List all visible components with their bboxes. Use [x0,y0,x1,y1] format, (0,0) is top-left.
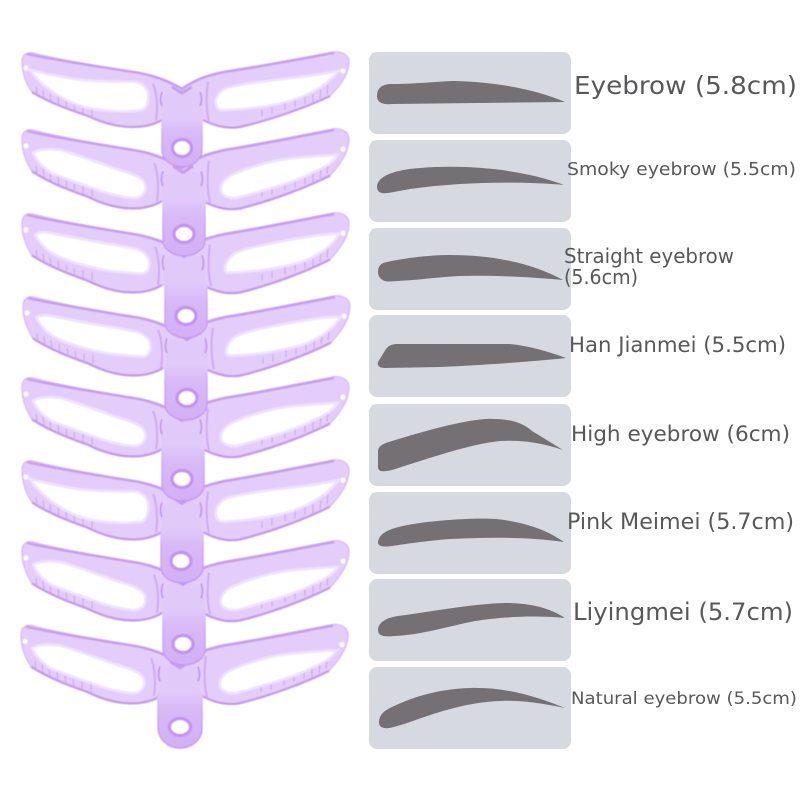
stencil 3 [22,213,349,338]
stencil 7 [22,541,349,665]
card: Liyingmei [369,579,571,661]
label: Liyingmei: Liyingmei (5.7cm) [573,598,793,626]
stencil 8 [21,624,348,748]
stencil 2 [22,129,349,256]
brow shape: Liyingmei [378,603,565,636]
card: Natural eyebrow [369,667,571,749]
brow shape: Natural eyebrow [379,688,565,728]
label: Smoky eyebrow: Smoky eyebrow (5.5cm) [567,159,796,180]
label: Pink Meimei: Pink Meimei (5.7cm) [567,510,794,535]
panel: purple eyebrow stencils [21,52,350,748]
stencil 4 [23,296,350,420]
card: Pink Meimei [369,492,571,574]
label: Eyebrow: Eyebrow (5.8cm) [574,71,797,100]
card: Eyebrow [369,52,571,134]
brow shape: Smoky eyebrow [377,167,564,193]
stencil 5 [22,377,349,501]
brow shape: Pink Meimei [378,519,564,547]
label: High eyebrow: High eyebrow (6cm) [571,422,790,446]
brow shape: Han Jianmei [378,344,566,368]
card: Smoky eyebrow [369,140,571,222]
stencil 6 [22,460,349,583]
brow shape: Eyebrow [377,81,565,104]
label: Han Jianmei: Han Jianmei (5.5cm) [569,333,786,357]
label: Straight eyebrow: (5.6cm) [564,265,638,289]
label: Natural eyebrow: Natural eyebrow (5.5cm) [571,689,797,709]
stencil 1 [22,52,349,167]
brow shape: High eyebrow [378,419,563,471]
card: Straight eyebrow [369,228,571,310]
label: Straight eyebrow: Straight eyebrow [564,244,734,268]
card: High eyebrow [369,404,571,486]
card: Han Jianmei [369,315,571,397]
label: Straight eyebrow [564,244,734,289]
brow shape: Straight eyebrow [378,255,563,282]
